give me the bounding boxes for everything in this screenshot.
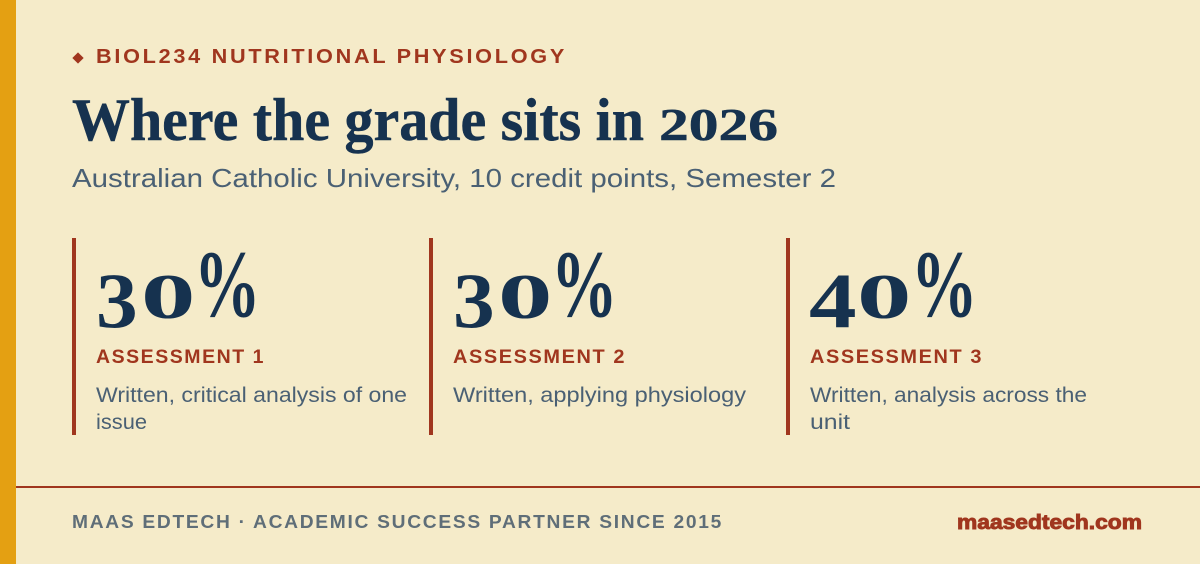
label: assessment 1: ASSESSMENT 1 — [96, 347, 265, 368]
description: assessment 1: Written, critical analysis of one — [96, 384, 407, 407]
stat: 40 percent: 4 — [809, 257, 857, 344]
stat: 30 percent: % — [551, 231, 618, 337]
label: assessment 3: ASSESSMENT 3 — [810, 347, 983, 368]
stat: 30 percent: 3 — [96, 257, 138, 344]
panel: assessment 2 — [429, 231, 747, 435]
stat: 30 percent — [453, 231, 618, 344]
description: assessment 1 — [96, 384, 407, 434]
icon: diamond bullet — [72, 52, 84, 64]
description: assessment 3: unit — [810, 411, 850, 434]
description: assessment 1: issue — [96, 411, 147, 434]
stat: 30 percent: 0 — [498, 261, 552, 332]
panel: assessment 1 — [72, 231, 407, 435]
title: Where the grade sits in — [72, 87, 644, 153]
stat: 30 percent: 0 — [141, 261, 195, 332]
panel: assessment 3 — [786, 231, 1087, 435]
eyebrow: course code: BIOL234 NUTRITIONAL PHYSIOLOGY — [96, 46, 567, 68]
stat: 30 percent: % — [194, 231, 260, 337]
description: assessment 3: Written, analysis across the — [810, 384, 1087, 407]
description: assessment 3 — [810, 384, 1087, 434]
footer: partner line: MAAS EDTECH · ACADEMIC SUCCESS PARTNER SINCE 2015 — [72, 512, 723, 532]
stat: 30 percent — [96, 231, 260, 344]
left accent bar — [0, 0, 16, 564]
stat: 30 percent: 3 — [453, 257, 495, 344]
description: assessment 2: Written, applying physiology — [453, 384, 747, 407]
footer: website: maasedtech.com — [957, 512, 1142, 534]
stat: 40 percent: 0 — [857, 261, 911, 332]
stat: 40 percent — [809, 231, 978, 344]
stat: 40 percent: % — [911, 231, 978, 337]
subtitle: Australian Catholic University, 10 credit points, Semester 2 — [72, 163, 836, 193]
label: assessment 2: ASSESSMENT 2 — [453, 347, 626, 368]
title: 2026 — [659, 99, 778, 150]
